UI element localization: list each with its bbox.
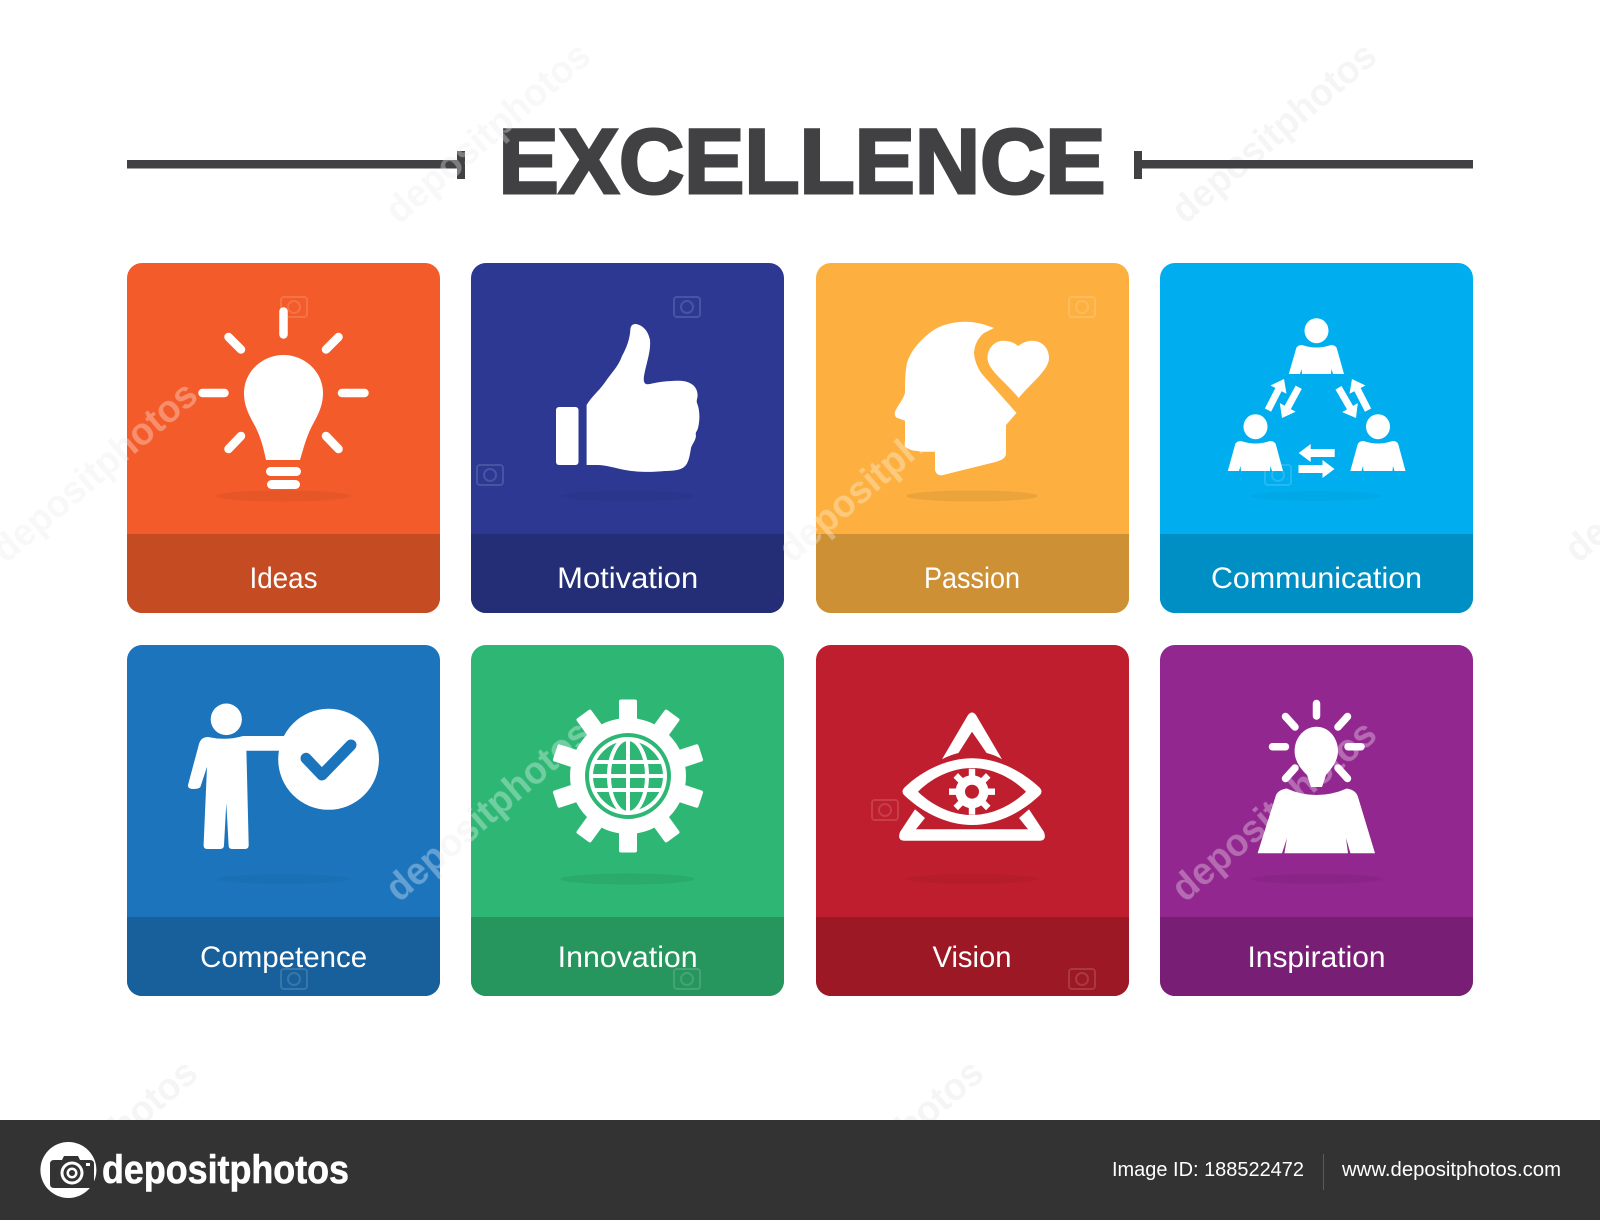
icon: thumbs up xyxy=(556,324,699,472)
watermark layer over cards and title xyxy=(0,34,1385,910)
panel: Passion xyxy=(816,263,1129,613)
label: Innovation: Innovation xyxy=(558,941,698,974)
footer website: www.depositphotos.com xyxy=(1341,1159,1561,1181)
footer image id: Image ID: 188522472 xyxy=(1112,1159,1304,1181)
watermark layer on white background: depositphotos xyxy=(1164,712,1385,910)
watermark layer on white background: depositphotos xyxy=(378,712,599,910)
label: Inspiration: Inspiration xyxy=(1248,941,1386,974)
label: Motivation: Motivation xyxy=(557,562,698,595)
watermark layer over cards and title: depositphotos xyxy=(378,712,599,910)
panel: Innovation xyxy=(471,645,784,996)
watermark layer on white background: depositphotos xyxy=(1164,34,1385,232)
watermark camera marks on cards xyxy=(281,297,1291,989)
icon: three people exchanging xyxy=(1228,318,1406,478)
panel: Inspiration xyxy=(1160,645,1473,996)
panel: Vision xyxy=(816,645,1129,996)
label: Vision: Vision xyxy=(932,941,1012,974)
watermark layer over cards and title: depositphotos xyxy=(771,373,992,571)
icon: depositphotos camera logo xyxy=(40,1142,96,1198)
panel: Communication xyxy=(1160,263,1473,613)
label: Ideas: Ideas xyxy=(250,562,318,595)
label: Communication: Communication xyxy=(1211,562,1422,595)
icon: eye in triangle with gear iris xyxy=(899,712,1045,841)
panel: Motivation xyxy=(471,263,784,613)
title rule right xyxy=(1134,151,1473,179)
footer brand name: depositphotos xyxy=(102,1148,349,1192)
panel: Ideas xyxy=(127,263,440,613)
icon: person with light bulb head xyxy=(1258,704,1375,853)
watermark layer over cards and title: depositphotos xyxy=(1164,712,1385,910)
icon: gear with globe xyxy=(552,700,704,852)
title: EXCELLENCE xyxy=(498,111,1106,213)
icon: person pointing at check mark xyxy=(188,704,379,849)
watermark layer on white background: depositphotos xyxy=(378,34,599,232)
icon: light bulb xyxy=(202,312,364,489)
footer divider xyxy=(1323,1154,1324,1190)
panel: Competence xyxy=(127,645,440,996)
footer bar xyxy=(0,1120,1600,1220)
title rule left xyxy=(127,151,465,179)
watermark layer on white background: depositphotos xyxy=(771,373,992,571)
label: Passion: Passion xyxy=(924,562,1020,595)
icon: head with heart xyxy=(895,322,1049,475)
label: Competence: Competence xyxy=(200,941,367,974)
watermark layer over cards and title: depositphotos xyxy=(378,34,599,232)
